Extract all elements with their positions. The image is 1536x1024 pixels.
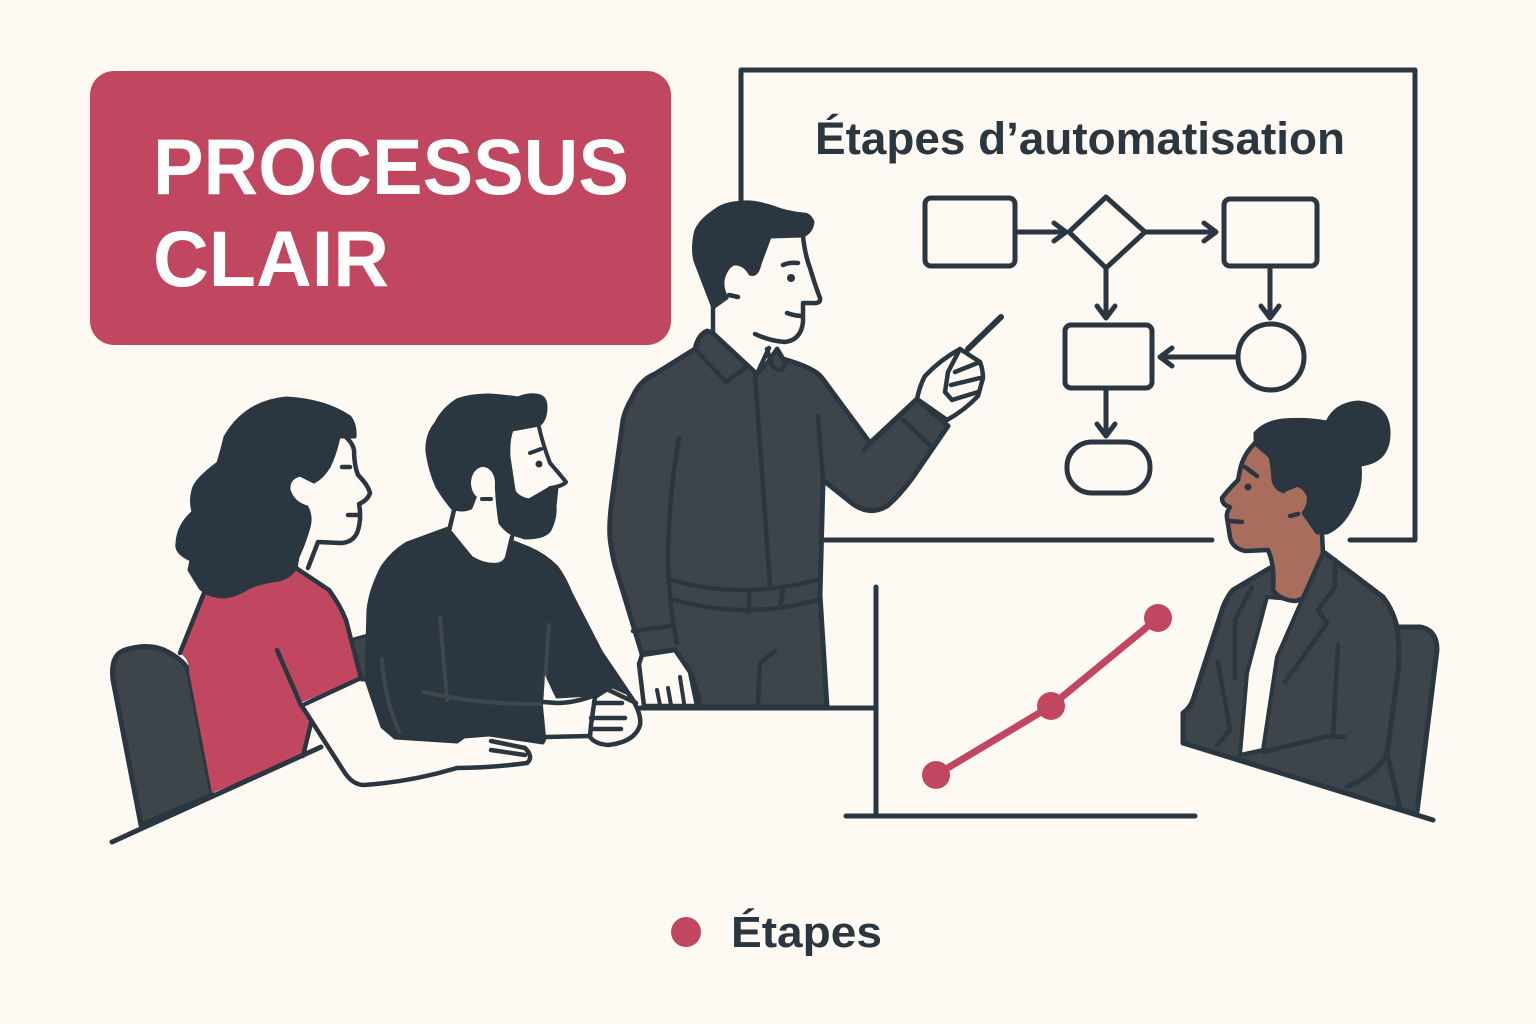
table edges	[112, 743, 1433, 842]
man ear	[471, 467, 495, 499]
woman hair	[177, 398, 355, 597]
man hands	[590, 686, 640, 745]
line chart	[846, 587, 1195, 816]
man sleeve	[590, 650, 636, 703]
figure: bearded man	[366, 395, 640, 745]
whiteboard heading: Étapes d’automatisation	[815, 113, 1345, 164]
presenter hair	[694, 202, 813, 308]
man neck lines	[449, 510, 512, 565]
presenter pointing hand	[917, 349, 983, 420]
right woman neck and face	[1222, 443, 1323, 601]
figure: woman in red	[112, 398, 530, 825]
legend: Étapes	[731, 907, 882, 957]
title banner	[90, 71, 671, 345]
woman arm	[277, 650, 530, 785]
man forearm	[543, 675, 595, 737]
right woman chair	[1387, 627, 1437, 812]
woman facial features	[342, 467, 358, 515]
right woman facial features	[1230, 467, 1298, 522]
title banner: CLAIR	[153, 214, 389, 303]
right woman jacket lines	[1217, 560, 1345, 752]
presenter body	[610, 331, 948, 707]
man facial features	[482, 427, 566, 499]
woman shirt outline	[180, 568, 361, 704]
right woman hair and bun	[1255, 402, 1389, 533]
presenter clothing lines	[633, 305, 930, 704]
back chair sliver	[350, 635, 368, 680]
title banner: PROCESSUS	[153, 122, 629, 211]
woman red shirt	[180, 568, 361, 793]
right woman ear	[1285, 487, 1307, 516]
right woman white shirt	[1240, 597, 1302, 755]
woman face outline	[308, 432, 370, 568]
whiteboard frame	[741, 70, 1415, 540]
presenter neck and face	[713, 236, 820, 374]
right woman jacket	[1183, 553, 1417, 812]
flowchart	[925, 197, 1317, 493]
woman neck and face	[296, 437, 370, 568]
woman chair	[112, 646, 212, 825]
man black shirt	[366, 528, 607, 743]
figure: woman on right	[1183, 402, 1437, 812]
figure: presenter	[610, 202, 1001, 707]
legend	[671, 907, 882, 957]
presenter pointer	[968, 317, 1001, 349]
man neck and face	[448, 427, 566, 565]
right woman jacket outline	[1183, 553, 1400, 808]
table back edge	[640, 706, 876, 710]
presenter face outline and features	[729, 236, 820, 342]
man hair and beard	[427, 395, 557, 538]
man shirt fold lines	[382, 617, 549, 732]
presenter lower hand	[639, 650, 697, 706]
